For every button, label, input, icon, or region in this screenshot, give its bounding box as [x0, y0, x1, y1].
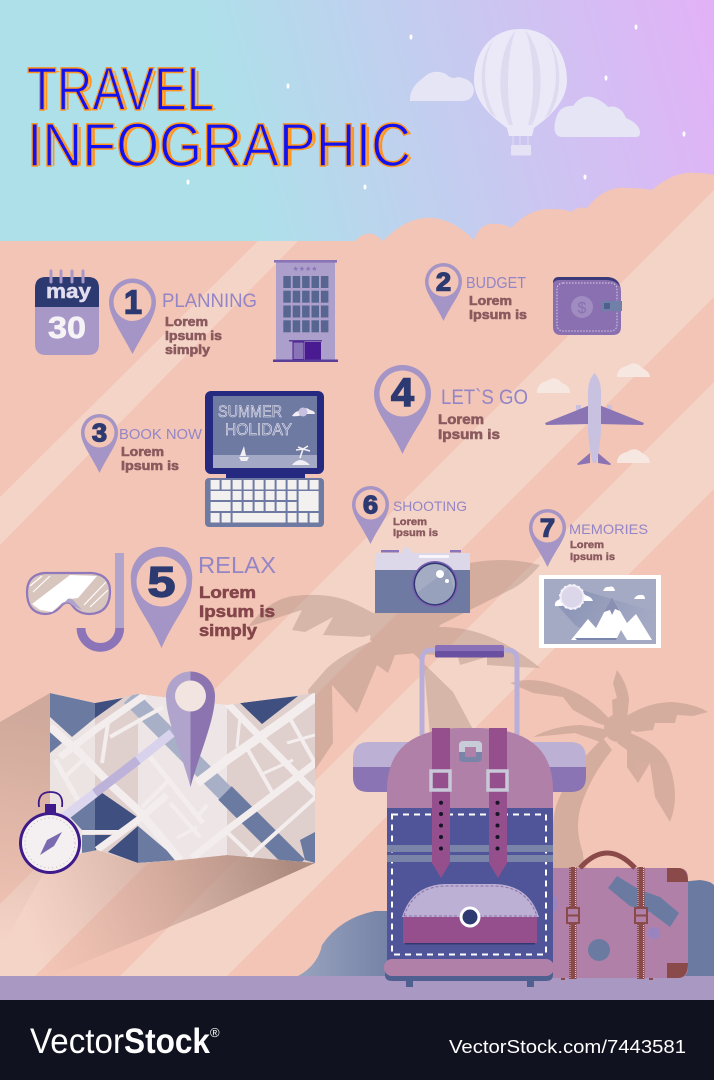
pin 3: 3 — [92, 420, 107, 448]
map panels — [50, 690, 315, 865]
text relax: simply — [199, 622, 258, 640]
goggles icon — [27, 573, 110, 614]
text shooting — [393, 517, 438, 539]
vectorstock url: VectorStock.com/7443581 — [449, 1036, 686, 1057]
screen icons — [239, 408, 315, 465]
snorkel icon — [81, 553, 124, 647]
footer bar — [0, 1000, 714, 1080]
screen text — [218, 402, 292, 439]
palm tree left silhouette — [248, 560, 540, 770]
pin 4 — [374, 365, 431, 454]
text planning — [165, 315, 222, 357]
text let's go: Lorem — [438, 412, 484, 427]
camera icon — [375, 547, 470, 613]
heading memories: MEMORIES — [569, 521, 648, 537]
text budget — [469, 294, 527, 322]
heading budget: BUDGET — [466, 275, 526, 292]
text planning: simply — [165, 343, 210, 357]
title: INFOGRAPHIC — [32, 112, 416, 180]
pin 7: 7 — [540, 514, 555, 542]
text book now: Lorem — [121, 445, 164, 459]
straps — [567, 867, 647, 979]
text memories: Ipsum is — [570, 552, 615, 563]
centre loop — [459, 741, 482, 762]
text book now: Ipsum is — [121, 459, 179, 473]
purple route — [60, 733, 172, 820]
palm tree right silhouette — [510, 670, 708, 885]
corners — [667, 868, 688, 978]
top dome — [387, 728, 553, 808]
step 4: let's go — [374, 365, 528, 454]
text budget: Lorem — [469, 294, 512, 308]
title — [27, 55, 416, 180]
framed photo — [539, 575, 661, 648]
heading book now: BOOK NOW — [119, 426, 203, 443]
title: TRAVEL — [27, 55, 214, 123]
screen text: HOLIDAY — [225, 420, 292, 439]
photo clouds — [555, 586, 645, 606]
text relax: Lorem — [199, 584, 256, 602]
wallet icon — [553, 277, 622, 335]
strap holes — [439, 801, 500, 850]
text book now — [121, 445, 179, 473]
text let's go: Ipsum is — [438, 427, 500, 442]
step 5: relax — [131, 547, 276, 648]
step 2: budget — [425, 263, 527, 322]
heading relax: RELAX — [198, 552, 276, 578]
base — [384, 959, 554, 987]
calendar icon: may — [46, 281, 92, 303]
diagonal band — [130, 697, 225, 793]
sky background — [0, 0, 714, 260]
pin 1 — [109, 278, 156, 354]
pin 4: 4 — [391, 371, 415, 415]
pin 5: 5 — [148, 558, 176, 606]
step 3: book now — [81, 414, 203, 473]
tape — [608, 876, 679, 927]
handle — [580, 853, 635, 868]
mountains — [571, 597, 652, 640]
keyboard — [205, 478, 324, 527]
step 6: shooting — [352, 486, 467, 544]
screen text: SUMMER — [218, 402, 282, 421]
pin 2: 2 — [436, 268, 451, 296]
hot air balloon — [474, 29, 567, 156]
sky clouds — [410, 72, 640, 137]
hills — [298, 880, 714, 976]
text planning: Lorem — [165, 315, 208, 329]
hotel icon — [273, 260, 338, 362]
dark map areas — [50, 693, 315, 863]
text shooting: Ipsum is — [393, 528, 438, 539]
title: INFOGRAPHIC — [27, 111, 411, 179]
trolley handle — [422, 650, 517, 735]
title: TRAVEL — [32, 56, 218, 124]
vectorstock logo: ® — [210, 1025, 220, 1040]
stars — [186, 24, 686, 190]
map shadow — [0, 693, 315, 985]
hotel icon: ★★★★ — [292, 265, 318, 273]
step 1: planning — [109, 278, 257, 357]
pin 1: 1 — [124, 284, 142, 320]
small clouds — [537, 363, 650, 463]
calendar icon: 30 — [48, 310, 86, 345]
text relax: Ipsum is — [199, 603, 275, 621]
heading planning: PLANNING — [162, 291, 257, 312]
pin 5 — [131, 547, 192, 648]
side bolster — [353, 742, 586, 767]
vectorstock logo — [30, 1022, 220, 1061]
sand ground with cloud ridge — [0, 173, 714, 1011]
map location pin — [166, 672, 215, 787]
text memories: Lorem — [570, 540, 604, 551]
front pocket — [402, 884, 539, 944]
vectorstock logo: Vector — [30, 1022, 124, 1061]
buckles — [431, 771, 507, 790]
text memories — [570, 540, 615, 563]
sun — [560, 584, 584, 610]
vectorstock logo: Stock — [124, 1022, 210, 1061]
text planning: Ipsum is — [165, 329, 222, 343]
backpack — [353, 645, 586, 987]
laptop icon — [205, 391, 324, 527]
calendar icon — [35, 271, 99, 355]
stickers — [588, 939, 610, 961]
folded city map — [50, 690, 318, 866]
text budget: Ipsum is — [469, 308, 527, 322]
compass icon — [19, 792, 81, 874]
suitcase — [553, 853, 688, 980]
map roads — [50, 695, 318, 860]
text relax — [199, 584, 275, 640]
text let's go — [438, 412, 500, 442]
ground strip — [0, 976, 714, 1000]
airplane icon — [537, 363, 650, 465]
heading shooting: SHOOTING — [393, 498, 467, 514]
step 7: memories — [529, 509, 648, 567]
straps — [432, 728, 507, 878]
lower body — [387, 808, 553, 963]
pin 6: 6 — [363, 492, 378, 520]
heading let's go: LET`S GO — [441, 386, 528, 409]
text shooting: Lorem — [393, 517, 427, 528]
wallet icon: $ — [578, 300, 587, 317]
